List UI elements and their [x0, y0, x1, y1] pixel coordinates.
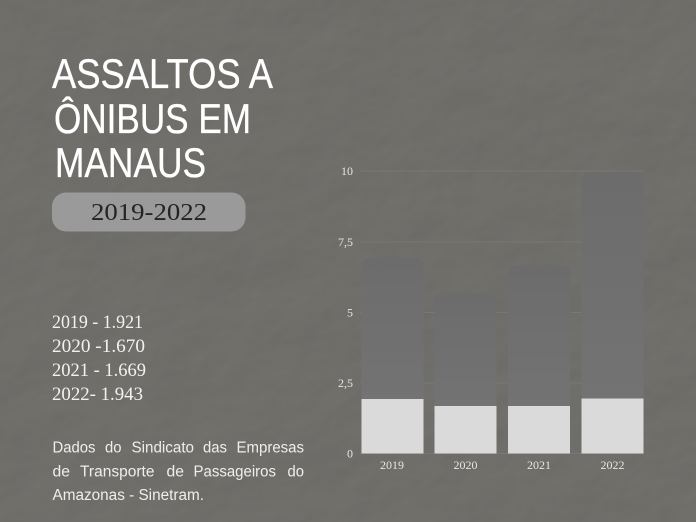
yearly figures list: 2021 - 1.669	[52, 361, 146, 381]
period badge: 2019-2022: 2019-2022	[91, 200, 207, 226]
bar: 2020	[434, 293, 496, 454]
x axis labels	[380, 458, 624, 472]
source note: do	[288, 464, 304, 480]
x axis labels: 2022	[600, 458, 624, 472]
source note: das	[203, 440, 227, 456]
source note: de	[166, 464, 184, 480]
x axis labels: 2019	[380, 458, 404, 472]
source note: Empresas	[236, 440, 304, 456]
source note: de	[52, 464, 70, 480]
x axis labels: 2020	[454, 458, 478, 472]
source note: Amazonas - Sinetram.	[52, 487, 204, 504]
title: ÔNIBUS EM	[54, 95, 251, 142]
yearly figures list: 2019 - 1.921	[52, 313, 143, 333]
bar chart	[338, 164, 644, 472]
y axis labels: 7,5	[338, 235, 353, 249]
bar: 2021	[508, 265, 570, 454]
title: ASSALTOS A	[52, 50, 273, 97]
source note: Dados	[52, 440, 96, 456]
y axis labels: 5	[347, 306, 353, 320]
yearly figures list: 2020 -1.670	[52, 337, 145, 357]
bar: 2019	[362, 258, 424, 454]
source note: Sindicato	[132, 440, 194, 456]
source note: Transporte	[80, 464, 154, 480]
period badge: 2019-2022	[52, 192, 246, 232]
source note: Passageiros	[194, 464, 276, 480]
yearly figures list	[52, 313, 146, 405]
y axis labels: 0	[347, 446, 353, 460]
y axis labels: 10	[341, 164, 353, 178]
source note: do	[105, 440, 122, 456]
y axis labels	[338, 164, 353, 460]
yearly figures list: 2022- 1.943	[52, 385, 143, 405]
title	[52, 50, 273, 186]
chart gridlines	[360, 171, 644, 454]
source note	[52, 440, 304, 504]
y axis labels: 2,5	[338, 376, 353, 390]
bar: 2022	[582, 172, 644, 454]
title: MANAUS	[55, 139, 206, 186]
x axis labels: 2021	[527, 458, 551, 472]
